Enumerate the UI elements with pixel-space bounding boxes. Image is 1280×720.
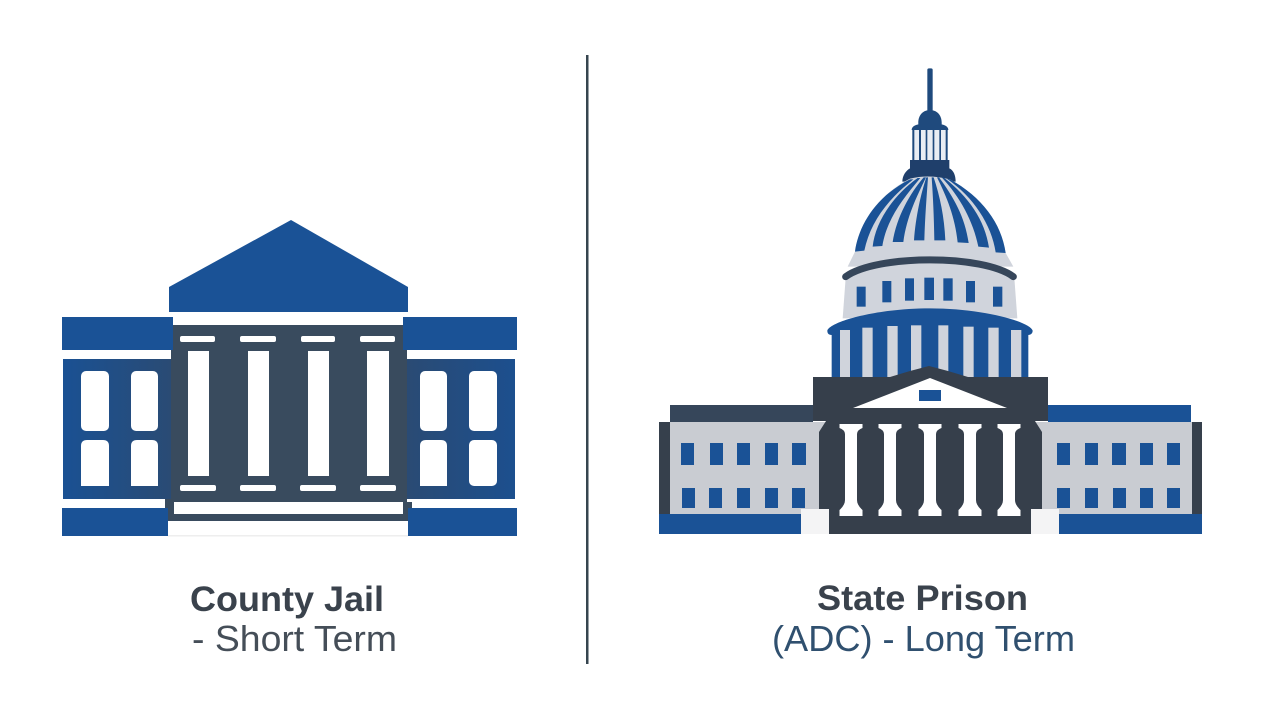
right wing roof block <box>403 317 517 350</box>
left wing facade <box>670 422 825 514</box>
left wing <box>63 359 185 499</box>
label: county jail <box>190 580 397 659</box>
state prison heading: State Prison <box>817 579 1028 618</box>
left wing windows <box>681 443 806 508</box>
pediment triangle <box>853 378 1007 408</box>
central colonnade block <box>165 325 412 521</box>
lantern backing <box>912 130 948 161</box>
short term text: - Short Term <box>192 618 397 659</box>
column capitals <box>180 336 395 342</box>
left base band <box>659 514 801 534</box>
left wing roof <box>670 405 813 422</box>
drum <box>843 265 1017 318</box>
front step <box>174 502 403 514</box>
dome <box>848 176 1013 267</box>
column bases <box>180 485 396 491</box>
left entry block <box>801 509 829 534</box>
right wing <box>392 359 515 499</box>
left base block <box>62 508 168 536</box>
colonnade columns <box>840 325 1021 377</box>
long term text: (ADC) - Long Term <box>772 618 1075 659</box>
pediment window <box>919 390 941 401</box>
drum and colonnade <box>827 260 1033 378</box>
right wing windows <box>1057 443 1180 508</box>
county jail heading: County Jail <box>190 580 384 619</box>
drum windows <box>857 278 1002 307</box>
spire <box>927 68 933 112</box>
lantern and spire <box>902 68 956 182</box>
right wing windows <box>420 371 497 486</box>
dark dome ring <box>846 260 1013 277</box>
left edge wall <box>659 422 670 514</box>
lantern cap <box>912 110 948 130</box>
panel: county jail building icon <box>62 220 517 536</box>
dome ribs <box>855 177 1006 253</box>
pediment roof <box>169 220 408 312</box>
right base block <box>408 508 517 536</box>
columns <box>188 351 389 476</box>
left wing windows <box>81 371 158 486</box>
right wing roof <box>1048 405 1191 422</box>
right base band <box>1059 514 1202 534</box>
lantern columns <box>912 129 948 161</box>
right wing facade <box>1036 422 1192 514</box>
right entry block <box>1031 509 1059 534</box>
lantern base <box>902 160 956 182</box>
divider line <box>586 55 588 664</box>
panel: state prison capitol icon <box>659 68 1202 534</box>
dome body <box>848 176 1013 267</box>
lower step shadow <box>168 535 408 536</box>
central portico block <box>813 366 1048 534</box>
label: state prison <box>772 579 1075 659</box>
left wing roof block <box>62 317 173 350</box>
right edge wall <box>1192 422 1202 514</box>
colonnade roof and wall <box>827 308 1033 378</box>
portico columns <box>840 424 1020 516</box>
